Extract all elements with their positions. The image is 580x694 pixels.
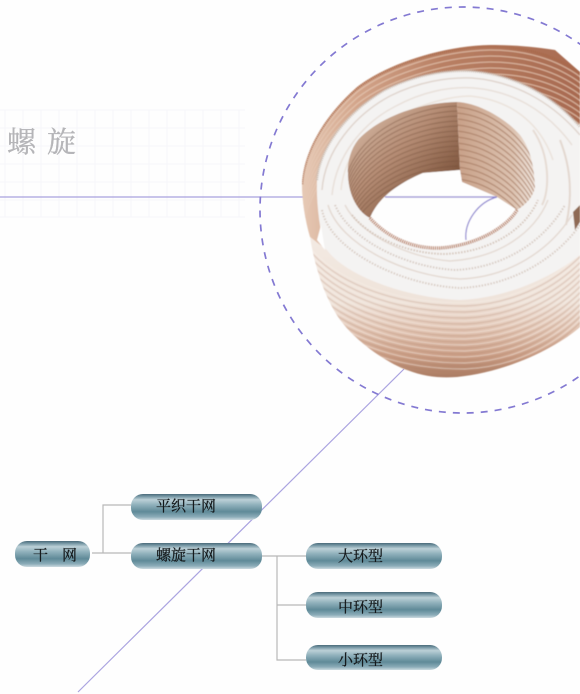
background grid bbox=[0, 110, 245, 217]
node: 平织干网: 平织干网 bbox=[156, 498, 216, 515]
diagonal accent line bbox=[78, 369, 404, 692]
dashed circle bbox=[260, 7, 580, 413]
node: 螺旋干网 bbox=[131, 543, 262, 569]
node: 中环型 bbox=[306, 592, 442, 618]
line through opening bbox=[385, 197, 497, 240]
coil ring layers bbox=[317, 71, 580, 288]
coil centre opening bbox=[370, 170, 517, 248]
coil inner wall right bbox=[456, 102, 536, 210]
node: 螺旋干网: 螺旋干网 bbox=[156, 547, 216, 564]
tree connectors bbox=[92, 505, 306, 660]
coil white ring bbox=[317, 71, 580, 312]
coil front band bbox=[300, 235, 580, 380]
coil inner wall left bbox=[347, 102, 461, 218]
node: 平织干网 bbox=[131, 494, 262, 520]
horizontal accent line bbox=[0, 196, 304, 198]
node: 大环型: 大环型 bbox=[338, 547, 383, 565]
node: 干网: 干网 bbox=[33, 547, 91, 564]
coil toothed rim bbox=[370, 210, 517, 248]
coil left notch bbox=[317, 225, 325, 250]
coil back band bbox=[301, 44, 580, 246]
product photo: spiral mesh coil bbox=[295, 40, 580, 380]
node: 小环型 bbox=[306, 645, 442, 670]
node: 中环型: 中环型 bbox=[338, 598, 383, 616]
coil right notch bbox=[573, 205, 580, 230]
title: 螺旋: 螺旋 bbox=[7, 126, 87, 159]
node: 小环型: 小环型 bbox=[338, 651, 383, 669]
node: 大环型 bbox=[306, 543, 442, 569]
node: 干网 bbox=[15, 541, 91, 567]
